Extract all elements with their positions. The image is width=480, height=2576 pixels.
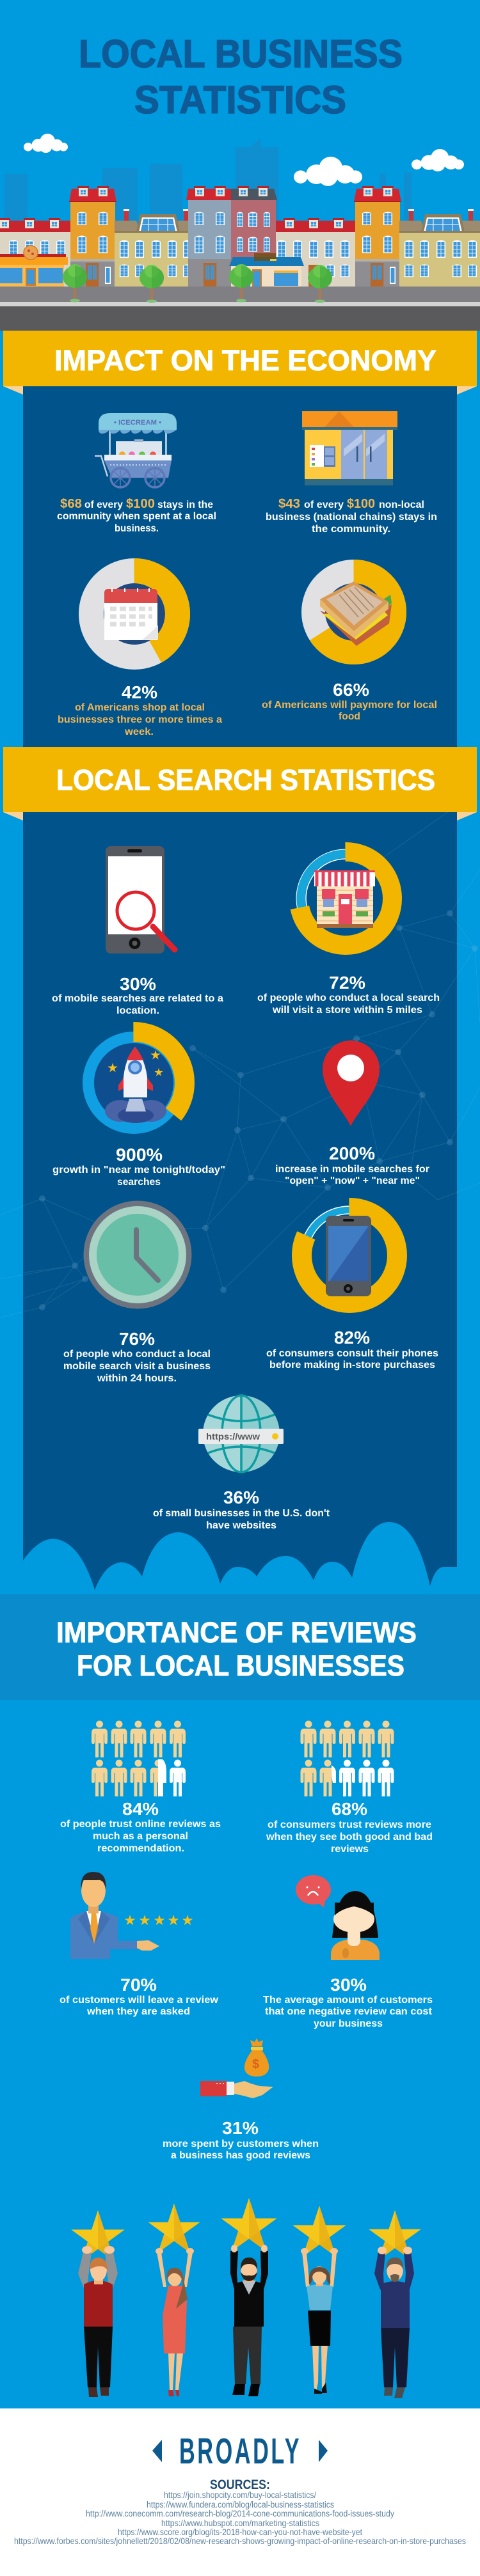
stat: 30%: of mobile searches are related to a xyxy=(52,993,223,1004)
heading: LOCAL SEARCH STATISTICS xyxy=(56,764,435,796)
sources heading: SOURCES: xyxy=(210,2478,270,2492)
illustration: person 2 holding star xyxy=(148,2204,200,2396)
stat: 42% xyxy=(58,682,222,737)
building: cream right xyxy=(276,218,355,287)
stat: 66%: of Americans will paymore for local xyxy=(262,700,437,711)
text: $68: $100 xyxy=(126,497,155,511)
stat: 70%: of customers will leave a review xyxy=(60,1995,219,2006)
title xyxy=(79,32,403,122)
stat: 76%: within 24 hours. xyxy=(97,1373,177,1384)
stat: 76%: mobile search visit a business xyxy=(63,1361,211,1372)
stat: 30%: The average amount of customers xyxy=(263,1995,433,2006)
panel: impact on the economy xyxy=(3,331,477,748)
sources list: https://www.hubspot.com/marketing-statistics xyxy=(161,2518,319,2528)
heading: FOR LOCAL BUSINESSES xyxy=(77,1649,404,1682)
building: khaki right xyxy=(399,209,480,287)
stat: 82%: of consumers consult their phones xyxy=(266,1348,438,1359)
icon: clock xyxy=(83,1201,192,1308)
text: $43: business (national chains) stays in xyxy=(266,512,437,522)
stat: 36%: 36% xyxy=(223,1488,259,1507)
icon: rocket xyxy=(105,1047,166,1123)
chart: 42% donut with calendar xyxy=(91,570,178,657)
illustration: person 1 holding star xyxy=(71,2210,125,2397)
stat: 200% xyxy=(275,1143,429,1186)
icon: calendar xyxy=(104,588,158,640)
stat: 68%: of consumers trust reviews more xyxy=(268,1819,431,1830)
stat: 200%: 200% xyxy=(329,1143,375,1163)
scalloped cloud edge xyxy=(23,1522,457,1593)
icon: five rating stars xyxy=(124,1915,193,1925)
kerb xyxy=(0,302,480,306)
stat: 70% xyxy=(60,1975,219,2017)
banner fold left xyxy=(3,812,23,821)
text: $43 xyxy=(266,497,437,535)
text: $43: $43 xyxy=(278,497,300,511)
text: $43: non-local xyxy=(379,499,424,510)
illustration: businessman with star rating xyxy=(70,1872,193,1959)
stat: 42%: 42% xyxy=(122,682,157,702)
stat: 70%: 70% xyxy=(120,1975,157,1995)
icon: right arrow xyxy=(319,2440,328,2462)
stat: 66%: food xyxy=(339,711,360,722)
panel: local search statistics xyxy=(0,747,480,1593)
banner fold right xyxy=(457,386,477,395)
stat: 30%: 30% xyxy=(330,1975,367,1995)
building: khaki left xyxy=(115,209,199,287)
stat: 36%: have websites xyxy=(206,1520,276,1531)
stat: 30% xyxy=(52,974,223,1016)
icon: phone with magnifier xyxy=(106,846,175,954)
heading band xyxy=(0,1594,480,1700)
stat: 900%: growth in "near me tonight/today" xyxy=(52,1165,225,1175)
text: $43: of every xyxy=(304,499,344,510)
icon: globe with url bar xyxy=(198,1395,284,1472)
building: grey and mauve xyxy=(186,186,277,287)
stat: 31%: a business has good reviews xyxy=(171,2150,310,2161)
stat: 30%: your business xyxy=(314,2018,383,2029)
stat: 72% xyxy=(257,973,440,1016)
logo: broadly xyxy=(152,2430,328,2471)
stat: 72%: will visit a store within 5 miles xyxy=(272,1005,422,1016)
banner xyxy=(3,747,477,812)
footer background xyxy=(0,2408,480,2576)
stat: 31%: more spent by customers when xyxy=(163,2139,319,2149)
stat: 84%: much as a personal xyxy=(93,1831,188,1842)
icon: map pin xyxy=(323,1041,380,1126)
stat: 42%: of Americans shop at local xyxy=(75,702,205,713)
icon: ice cream cart xyxy=(95,413,177,487)
stat: 30% xyxy=(263,1975,433,2029)
building: orange tower right xyxy=(354,186,401,287)
stat: 84%: 84% xyxy=(122,1799,159,1819)
title: STATISTICS xyxy=(134,78,346,122)
banner fold left xyxy=(3,386,23,395)
icon: store xyxy=(314,870,375,928)
building: blue awning shop xyxy=(229,253,304,290)
logo: broadly: BROADLY xyxy=(179,2430,301,2471)
stat: 36% xyxy=(153,1488,330,1531)
icon: storefront xyxy=(302,411,397,485)
stat: 30%: that one negative review can cost xyxy=(265,2006,432,2017)
clouds xyxy=(24,134,464,186)
stat: 900%: 900% xyxy=(116,1145,163,1165)
heading xyxy=(56,1616,417,1682)
stat: 900% xyxy=(52,1145,225,1188)
text: $43: $100 xyxy=(347,497,375,511)
chart: 900% donut with rocket xyxy=(83,1032,184,1133)
building: pizza shop xyxy=(0,218,70,287)
icon: speech bubble xyxy=(296,1875,331,1908)
chart: 82% donut with phone xyxy=(300,1206,399,1305)
stat: 31%: 31% xyxy=(222,2118,259,2138)
illustration: person 4 holding star xyxy=(292,2206,346,2394)
stat: 36%: of small businesses in the U.S. don't xyxy=(153,1508,330,1519)
stat: 76% xyxy=(63,1329,211,1384)
sources list xyxy=(14,2490,466,2546)
text: $68: of every xyxy=(84,499,123,510)
trees xyxy=(63,264,332,303)
stat: 66% xyxy=(262,680,437,722)
icon: hand with money bag xyxy=(200,2038,273,2098)
building: orange tower left xyxy=(69,186,116,287)
illustration: person 3 holding star xyxy=(221,2198,277,2396)
text: $68: $68 xyxy=(60,497,82,511)
distant skyline xyxy=(4,138,412,226)
stat: 70%: when they are asked xyxy=(86,2006,190,2017)
title: LOCAL BUSINESS xyxy=(79,32,403,75)
text: $43: the community. xyxy=(312,524,390,535)
icon: phone xyxy=(326,1216,371,1296)
stat: 72%: of people who conduct a local search xyxy=(257,993,440,1003)
illustration: woman with angry speech bubble xyxy=(296,1875,380,1960)
icon: left arrow xyxy=(152,2440,162,2462)
stat: 84%: of people trust online reviews as xyxy=(60,1819,221,1830)
stat: 200%: increase in mobile searches for xyxy=(275,1164,429,1175)
stat: 30%: location. xyxy=(116,1005,159,1016)
text: $68 xyxy=(57,497,216,534)
icon grid: 68% people xyxy=(301,1720,394,1796)
footer xyxy=(14,2430,466,2546)
stat: 82%: 82% xyxy=(334,1328,370,1347)
stat: 72%: 72% xyxy=(329,973,365,993)
chart: 72% donut with store xyxy=(296,849,395,948)
chart: 66% donut with sandwich xyxy=(314,572,394,652)
icon: hand with money bag: $ xyxy=(252,2057,259,2071)
road xyxy=(0,306,480,331)
stat: 76%: 76% xyxy=(119,1329,155,1349)
icon: ice cream cart: • ICECREAM • xyxy=(114,419,161,427)
text: $68: community when spent at a local xyxy=(57,511,216,522)
stat: 200%: "open" + "now" + "near me" xyxy=(285,1175,420,1186)
sources list: https://www.fundera.com/blog/local-business-statistics xyxy=(147,2500,334,2509)
sources list: https://www.score.org/blog/its-2018-how-can-you-not-have-website-yet xyxy=(118,2527,362,2537)
stat: 76%: of people who conduct a local xyxy=(63,1349,211,1360)
stat: 68%: when they see both good and bad xyxy=(266,1832,433,1842)
network nodes xyxy=(39,799,478,1310)
stat: 900%: searches xyxy=(117,1177,161,1188)
sources list: https://join.shopcity.com/buy-local-statistics/ xyxy=(164,2490,316,2500)
icon grid: 84% people xyxy=(92,1720,186,1796)
icon: sandwich xyxy=(320,581,392,646)
text: $68: stays in the xyxy=(157,499,213,510)
panel: importance of reviews xyxy=(0,1594,480,2398)
stat: 68%: 68% xyxy=(332,1799,367,1819)
network pattern xyxy=(0,802,480,1317)
banner xyxy=(3,331,477,386)
sources list: http://www.conecomm.com/research-blog/2014-cone-communications-food-issues-study xyxy=(86,2509,394,2518)
stat: 68%: reviews xyxy=(331,1844,369,1855)
stat: 82%: before making in-store purchases xyxy=(269,1360,435,1370)
stat: 84%: recommendation. xyxy=(97,1843,184,1854)
heading: IMPACT ON THE ECONOMY xyxy=(54,344,436,377)
sidewalk xyxy=(0,287,480,302)
banner fold right xyxy=(457,812,477,821)
stat: 66%: 66% xyxy=(333,680,369,700)
stat: 42%: businesses three or more times a xyxy=(58,714,222,725)
stat: 68% xyxy=(266,1799,433,1855)
heading: IMPORTANCE OF REVIEWS xyxy=(56,1616,417,1649)
street of buildings xyxy=(0,186,480,331)
stat: 84% xyxy=(60,1799,221,1854)
icon: globe with url bar: https://www xyxy=(206,1431,260,1441)
stat: 30%: 30% xyxy=(120,974,156,994)
panel background xyxy=(23,384,457,748)
stat: 82% xyxy=(266,1328,438,1370)
stat: 31% xyxy=(163,2118,319,2161)
stat: 42%: week. xyxy=(124,726,154,737)
illustration: person 5 holding star xyxy=(369,2210,421,2398)
panel background xyxy=(23,811,457,1592)
text: $68: business. xyxy=(115,523,159,534)
